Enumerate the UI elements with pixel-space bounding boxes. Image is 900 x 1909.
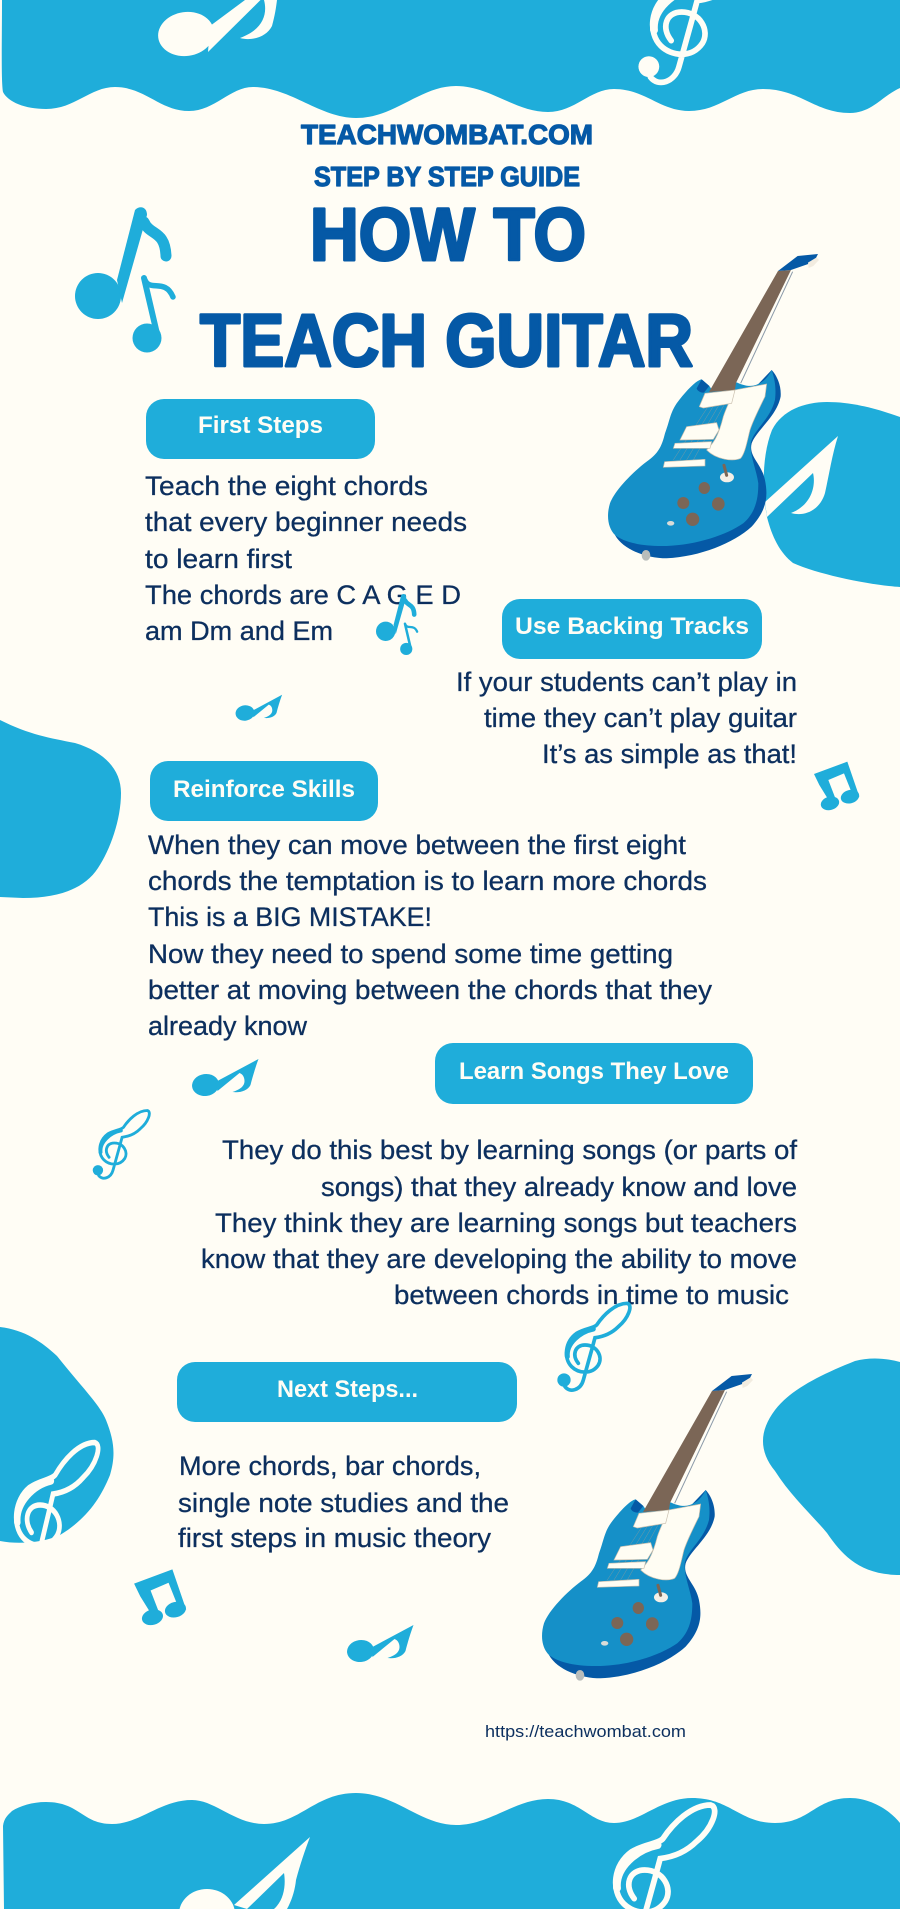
- icon: small double notes over text: [376, 594, 417, 655]
- body text: chords the temptation is to learn more chords: [148, 866, 707, 896]
- body text: [148, 830, 713, 1041]
- body text: It’s as simple as that!: [542, 739, 797, 769]
- blob left middle: [0, 720, 121, 898]
- body text: [145, 471, 467, 646]
- heading button: First Steps: [198, 412, 323, 439]
- icon: small eighth note: [235, 695, 282, 722]
- heading button: Reinforce Skills: [173, 776, 355, 803]
- icon: beamed notes lower left: [134, 1569, 188, 1627]
- subtitle: STEP BY STEP GUIDE: [314, 161, 580, 192]
- main title line two: TEACH GUITAR: [200, 299, 693, 382]
- body text: between chords in time to music: [394, 1280, 789, 1310]
- blob lower right: [763, 1358, 900, 1575]
- body text: songs) that they already know and love: [321, 1172, 797, 1202]
- icon: guitar upper: [608, 254, 819, 561]
- heading button: Learn Songs They Love: [459, 1058, 729, 1085]
- icon: white eighth note bottom: [179, 1837, 310, 1909]
- icon: beamed notes right: [814, 762, 861, 812]
- body text: More chords, bar chords,: [179, 1451, 481, 1481]
- icon: guitar lower: [542, 1374, 753, 1681]
- body text: [456, 667, 797, 769]
- title block: [200, 119, 693, 382]
- icon: white eighth note top: [155, 0, 277, 60]
- body text: am Dm and Em: [145, 616, 333, 646]
- body text: They do this best by learning songs (or parts of: [222, 1135, 798, 1165]
- body text: This is a BIG MISTAKE!: [148, 902, 432, 932]
- body text: [201, 1135, 798, 1310]
- icon: eighth note lower: [346, 1625, 414, 1664]
- panel: first steps: [145, 399, 467, 646]
- heading button: [177, 1362, 517, 1422]
- body text: that every beginner needs: [145, 507, 467, 537]
- icon: treble clef left: [93, 1110, 149, 1178]
- body text: They think they are learning songs but teachers: [215, 1208, 797, 1238]
- panel: use backing tracks: [456, 599, 797, 769]
- body text: If your students can’t play in: [456, 667, 797, 697]
- heading button: [150, 761, 378, 821]
- blob with white note, right: [764, 402, 900, 587]
- site name: TEACHWOMBAT.COM: [301, 119, 593, 150]
- top wave banner: [2, 0, 900, 118]
- website url: https://teachwombat.com: [485, 1722, 686, 1741]
- icon: white treble clef top: [638, 0, 752, 82]
- icon: double music notes upper left: [75, 207, 173, 352]
- body text: Teach the eight chords: [145, 471, 428, 501]
- body text: single note studies and the: [178, 1488, 509, 1518]
- icon: white note in blob: [765, 436, 838, 517]
- body text: When they can move between the first eight: [148, 830, 687, 860]
- panel: next steps: [177, 1362, 517, 1553]
- body text: The chords are C A G E D: [145, 580, 461, 610]
- bottom wave banner: [3, 1793, 900, 1909]
- panel: reinforce skills: [148, 761, 713, 1041]
- heading button: [146, 399, 375, 459]
- panel: learn songs they love: [201, 1043, 798, 1310]
- body text: know that they are developing the ability to move: [201, 1244, 797, 1274]
- body text: time they can’t play guitar: [484, 703, 797, 733]
- blob lower left with clef: [0, 1327, 113, 1558]
- heading button: [435, 1043, 753, 1104]
- body text: already know: [148, 1011, 307, 1041]
- heading button: [502, 599, 762, 659]
- heading button: Use Backing Tracks: [515, 613, 749, 640]
- body text: [178, 1451, 509, 1553]
- main title line one: HOW TO: [310, 193, 586, 276]
- body text: better at moving between the chords that they: [148, 975, 713, 1005]
- icon: white treble clef in blob: [16, 1442, 98, 1558]
- icon: white treble clef bottom: [616, 1805, 715, 1909]
- icon: eighth note middle: [191, 1059, 258, 1098]
- body text: Now they need to spend some time getting: [148, 939, 673, 969]
- body text: first steps in music theory: [178, 1523, 492, 1553]
- icon: treble clef centre: [557, 1303, 630, 1390]
- body text: to learn first: [145, 544, 293, 574]
- heading button: Next Steps...: [277, 1376, 418, 1403]
